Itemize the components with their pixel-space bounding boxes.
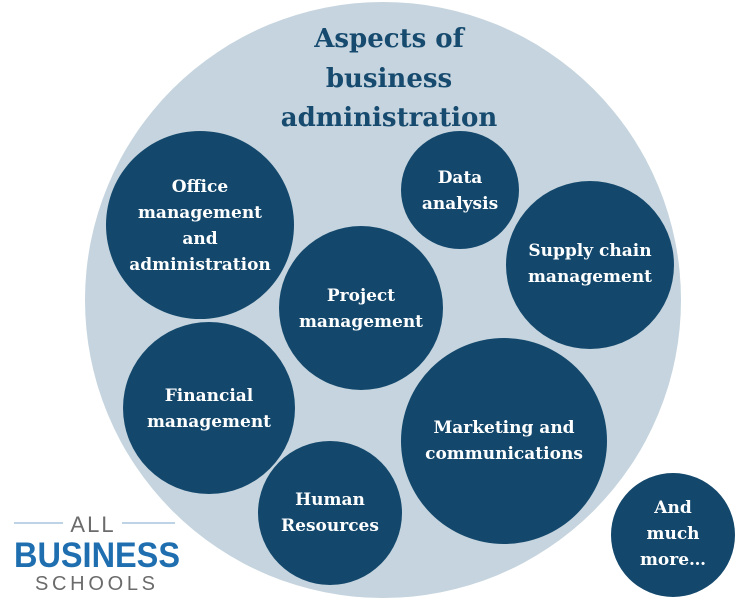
- title: Aspects of: [313, 24, 466, 54]
- circle: and much more: much: [646, 524, 700, 544]
- circle: human resources: [258, 441, 402, 585]
- logo: All Business Schools: SCHOOLS: [35, 573, 155, 595]
- circle: project management: [279, 226, 443, 390]
- circle: and much more: [611, 473, 735, 597]
- circle: office management: management: [138, 203, 262, 223]
- circle: marketing: [401, 338, 607, 544]
- logo: All Business Schools: [14, 512, 180, 595]
- circle: human resources: Human: [295, 490, 365, 510]
- circle: marketing: Marketing and: [433, 418, 575, 438]
- circle: and much more: more…: [640, 550, 706, 570]
- title: administration: [281, 103, 497, 133]
- circle: office management: Office: [172, 177, 228, 197]
- title: [281, 24, 497, 133]
- circle: office management: administration: [129, 255, 271, 275]
- circle: office management: [106, 131, 294, 319]
- circle: and much more: And: [653, 498, 692, 518]
- circle: data analysis: [401, 131, 519, 249]
- circle: supply chain: Supply chain: [528, 241, 652, 261]
- circle: marketing: communications: [425, 444, 583, 464]
- circle: supply chain: [506, 181, 674, 349]
- circle: financial management: Financial: [165, 386, 254, 406]
- logo: All Business Schools: BUSINESS: [14, 536, 180, 575]
- circle: project management: Project: [327, 286, 395, 306]
- circle: supply chain: management: [528, 267, 652, 287]
- circle: data analysis: analysis: [422, 194, 498, 214]
- logo: All Business Schools: ALL: [70, 512, 116, 537]
- circle: human resources: Resources: [281, 516, 379, 536]
- circle: financial management: management: [147, 412, 271, 432]
- circle: project management: management: [299, 312, 423, 332]
- circle: data analysis: Data: [438, 168, 482, 188]
- circle: office management: and: [182, 229, 218, 249]
- title: business: [326, 64, 452, 94]
- circle: financial management: [123, 322, 295, 494]
- panel: big background circle: [85, 2, 681, 598]
